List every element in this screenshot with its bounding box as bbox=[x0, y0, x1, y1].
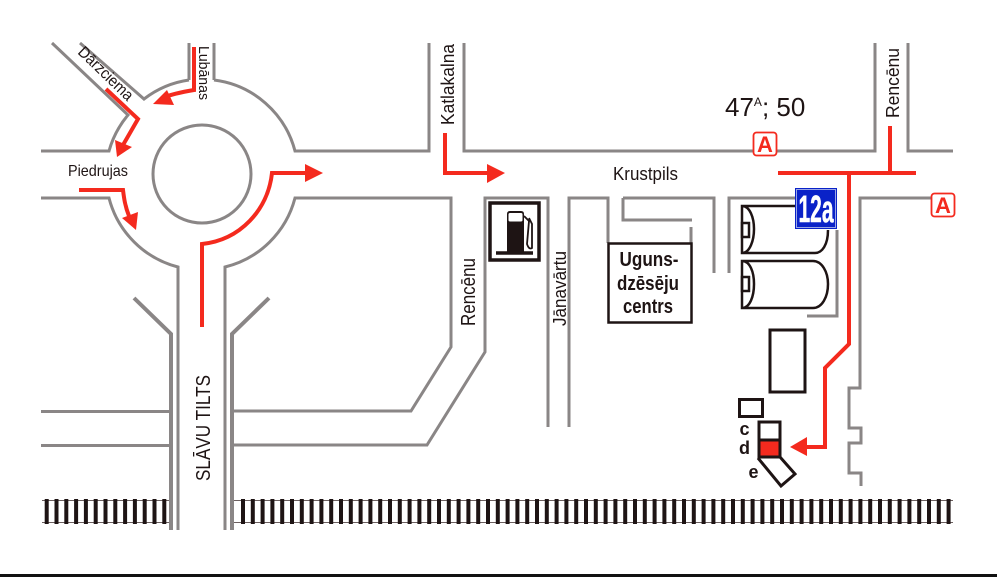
red route arrows bbox=[79, 47, 916, 456]
target building c d bbox=[759, 422, 780, 457]
route: Rencēnu to building bbox=[778, 126, 916, 456]
roundabout outer edge bbox=[41, 43, 953, 530]
fire centre box: Uguns- bbox=[620, 249, 678, 271]
roads near building block bbox=[729, 198, 932, 486]
route: Piedrujas bbox=[79, 190, 138, 230]
building block 12a bbox=[740, 206, 828, 486]
road sign A top bbox=[754, 132, 776, 157]
route: Katlakalna bbox=[445, 133, 505, 183]
large rectangle building bbox=[770, 330, 805, 392]
label Lubānas: Lubānas bbox=[195, 46, 212, 100]
house numbers: 47 bbox=[725, 92, 754, 122]
road sign A right: A bbox=[935, 193, 951, 218]
fire centre box: centrs bbox=[623, 296, 673, 318]
label Dārzciema: Dārzciema bbox=[74, 44, 136, 105]
building 1 bbox=[742, 206, 828, 253]
fuel station icon bbox=[490, 203, 539, 260]
building letter labels: c bbox=[740, 419, 750, 439]
route: main road to right bbox=[202, 164, 323, 327]
overpass side walls bbox=[134, 298, 269, 530]
label Krustpils: Krustpils bbox=[613, 164, 678, 184]
label Jānavārtu: Jānavārtu bbox=[550, 251, 570, 326]
fire centre box: dzēsēju bbox=[617, 273, 679, 295]
label Piedrujas: Piedrujas bbox=[68, 163, 128, 180]
left side streets bbox=[41, 412, 170, 446]
roundabout island bbox=[153, 125, 251, 223]
road sign A right bbox=[932, 193, 954, 218]
label Katlakalna: Katlakalna bbox=[438, 43, 458, 125]
route: Lubānas bbox=[153, 47, 194, 105]
blue sign 12a bbox=[795, 188, 837, 231]
road labels bbox=[68, 43, 903, 481]
house numbers: A bbox=[754, 95, 762, 109]
label SLĀVU TILTS: SLĀVU TILTS bbox=[192, 375, 215, 481]
building e bbox=[758, 457, 795, 486]
label Rencēnu street: Rencēnu bbox=[458, 258, 480, 326]
building letter labels: d bbox=[739, 438, 750, 458]
building letter labels bbox=[739, 419, 759, 482]
bottom bar bbox=[0, 574, 997, 577]
label Rencēnu top: Rencēnu bbox=[883, 48, 903, 118]
railway bbox=[42, 500, 953, 522]
building 2 bbox=[742, 261, 828, 308]
house numbers: ; 50 bbox=[762, 92, 805, 122]
building letter labels: e bbox=[748, 462, 759, 482]
small building bbox=[740, 400, 762, 416]
road sign A top: A bbox=[757, 132, 773, 157]
blue sign 12a: 12a bbox=[798, 189, 834, 231]
route: Dārzciema bbox=[106, 89, 138, 157]
road network bbox=[41, 43, 953, 530]
fire centre box bbox=[608, 244, 692, 322]
